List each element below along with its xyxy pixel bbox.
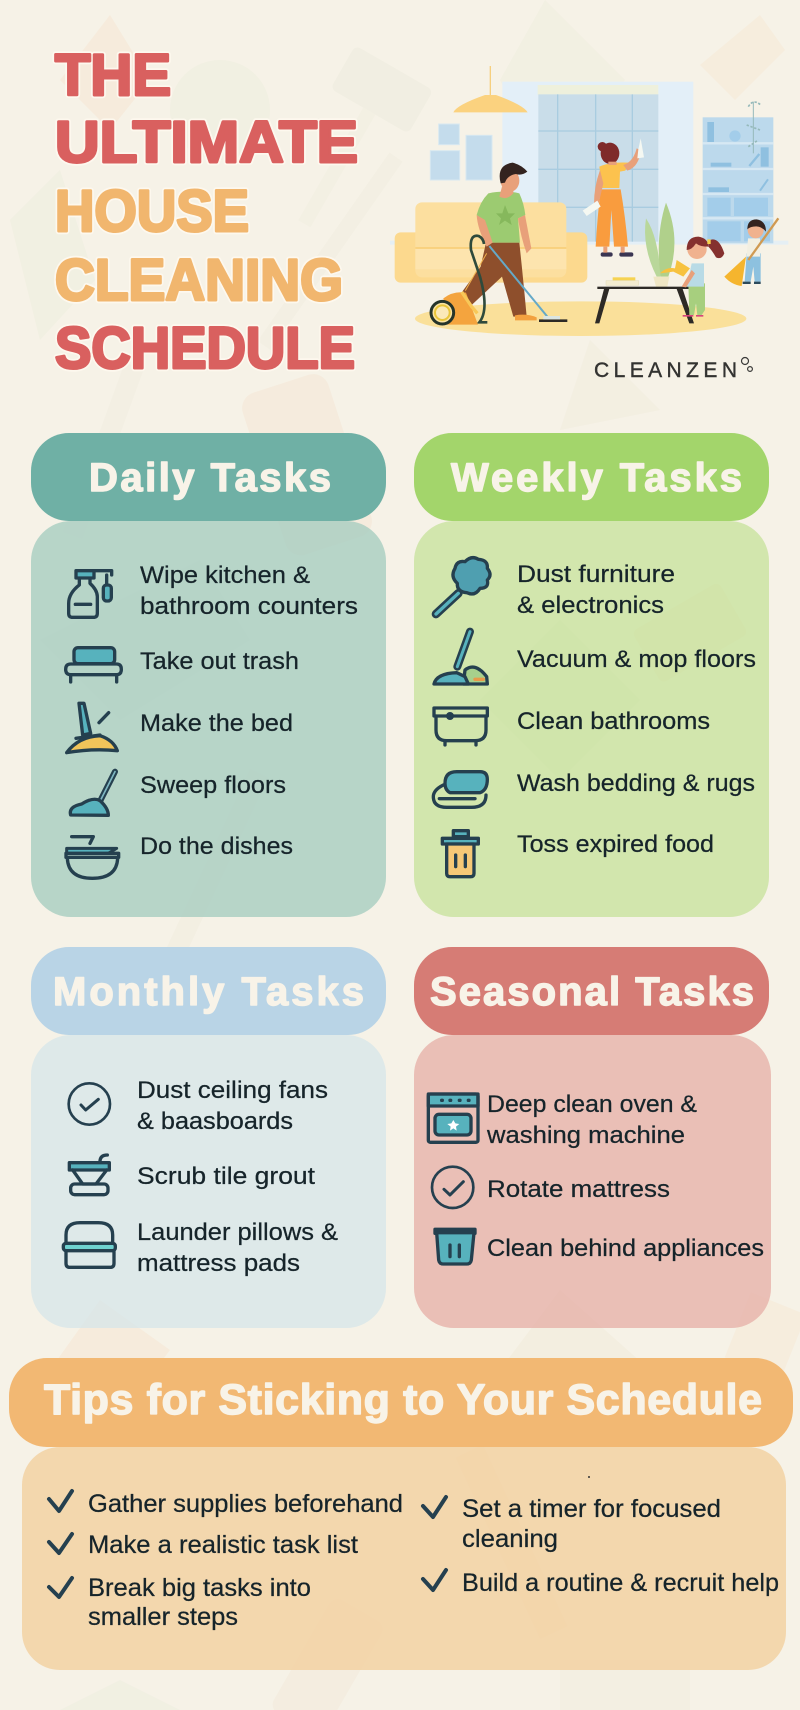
weekly task list: Toss expired food xyxy=(517,831,714,858)
tips right column: Set a timer for focused xyxy=(462,1495,721,1523)
weekly task list: Clean bathrooms xyxy=(517,708,710,735)
panel: monthly tasks xyxy=(31,947,386,1328)
monthly heading text: Monthly Tasks xyxy=(53,970,364,1014)
tips left column xyxy=(49,1490,403,1631)
title: SCHEDULE xyxy=(55,316,355,381)
daily task list: Sweep floors xyxy=(140,772,286,799)
monthly task list: Scrub tile grout xyxy=(137,1163,315,1190)
daily task list: Do the dishes xyxy=(140,833,293,860)
daily task list xyxy=(140,562,358,860)
weekly heading text: Weekly Tasks xyxy=(451,456,742,500)
weekly header xyxy=(414,433,769,521)
seasonal header xyxy=(414,947,769,1035)
monthly task list: mattress pads xyxy=(137,1250,300,1277)
seasonal body xyxy=(414,1035,771,1328)
monthly task list: Launder pillows & xyxy=(137,1219,338,1246)
panel: tips for sticking to your schedule xyxy=(9,1358,793,1670)
bookshelf xyxy=(703,102,773,243)
daily task list: Wipe kitchen & xyxy=(140,562,310,589)
daily task list: bathroom counters xyxy=(140,593,358,620)
seasonal task list xyxy=(486,1091,764,1262)
stray dot xyxy=(588,1476,590,1478)
monthly task list: & baasboards xyxy=(137,1108,293,1135)
tips heading text: Tips for Sticking to Your Schedule xyxy=(44,1376,762,1424)
weekly icons xyxy=(433,558,490,877)
tips right column xyxy=(423,1495,779,1597)
title: ULTIMATE xyxy=(55,110,358,175)
daily header xyxy=(31,433,386,521)
tips body xyxy=(22,1447,786,1670)
seasonal task list: Clean behind appliances xyxy=(487,1235,764,1262)
monthly body xyxy=(31,1035,386,1328)
monthly task list xyxy=(137,1077,338,1277)
title: SCHEDULE xyxy=(55,316,355,381)
title: HOUSE xyxy=(55,179,249,244)
seasonal heading text: Seasonal Tasks xyxy=(430,970,754,1014)
daily task list: Make the bed xyxy=(140,710,293,737)
seasonal task list: Deep clean oven & xyxy=(487,1091,697,1118)
monthly task list: Dust ceiling fans xyxy=(137,1077,328,1104)
man vacuuming xyxy=(431,163,567,325)
panel: seasonal tasks xyxy=(414,947,771,1328)
tips left column: Make a realistic task list xyxy=(88,1531,358,1559)
seasonal task list: Rotate mattress xyxy=(487,1176,670,1203)
potted plant xyxy=(645,203,674,287)
weekly task list: & electronics xyxy=(517,592,664,619)
tips right column: cleaning xyxy=(462,1525,558,1553)
title xyxy=(55,43,358,381)
weekly task list xyxy=(517,561,756,858)
boy sweeping xyxy=(724,218,778,286)
weekly body xyxy=(414,521,769,917)
lamp xyxy=(453,66,528,112)
daily heading text: Daily Tasks xyxy=(89,456,331,500)
tips left column: Break big tasks into xyxy=(88,1574,311,1602)
sofa xyxy=(395,202,587,283)
title: HOUSE xyxy=(55,179,249,244)
daily body xyxy=(31,521,386,917)
tips left column: smaller steps xyxy=(88,1603,238,1631)
title: THE xyxy=(55,43,171,108)
rug xyxy=(415,301,746,336)
coffee table xyxy=(595,277,694,323)
title: CLEANING xyxy=(55,248,343,313)
tips left column: Gather supplies beforehand xyxy=(88,1490,403,1518)
weekly task list: Dust furniture xyxy=(517,561,675,588)
title: ULTIMATE xyxy=(55,110,358,175)
monthly icons xyxy=(63,1083,115,1267)
daily icons xyxy=(66,571,121,878)
panel: daily tasks xyxy=(31,433,386,917)
monthly header xyxy=(31,947,386,1035)
weekly task list: Vacuum & mop floors xyxy=(517,646,756,673)
tips right column: Build a routine & recruit help xyxy=(462,1569,779,1597)
title: CLEANING xyxy=(55,248,343,313)
girl watering plant xyxy=(660,237,724,317)
title: THE xyxy=(55,43,171,108)
daily task list: Take out trash xyxy=(140,648,299,675)
illustration: family cleaning the living room xyxy=(390,66,788,336)
panel: weekly tasks xyxy=(414,433,769,917)
tips header xyxy=(9,1358,793,1447)
seasonal task list: washing machine xyxy=(486,1122,685,1149)
weekly task list: Wash bedding & rugs xyxy=(517,770,755,797)
logo: CLEANZEN: CLEANZEN xyxy=(594,359,737,382)
woman wiping window xyxy=(583,138,644,257)
seasonal icons xyxy=(428,1094,478,1264)
